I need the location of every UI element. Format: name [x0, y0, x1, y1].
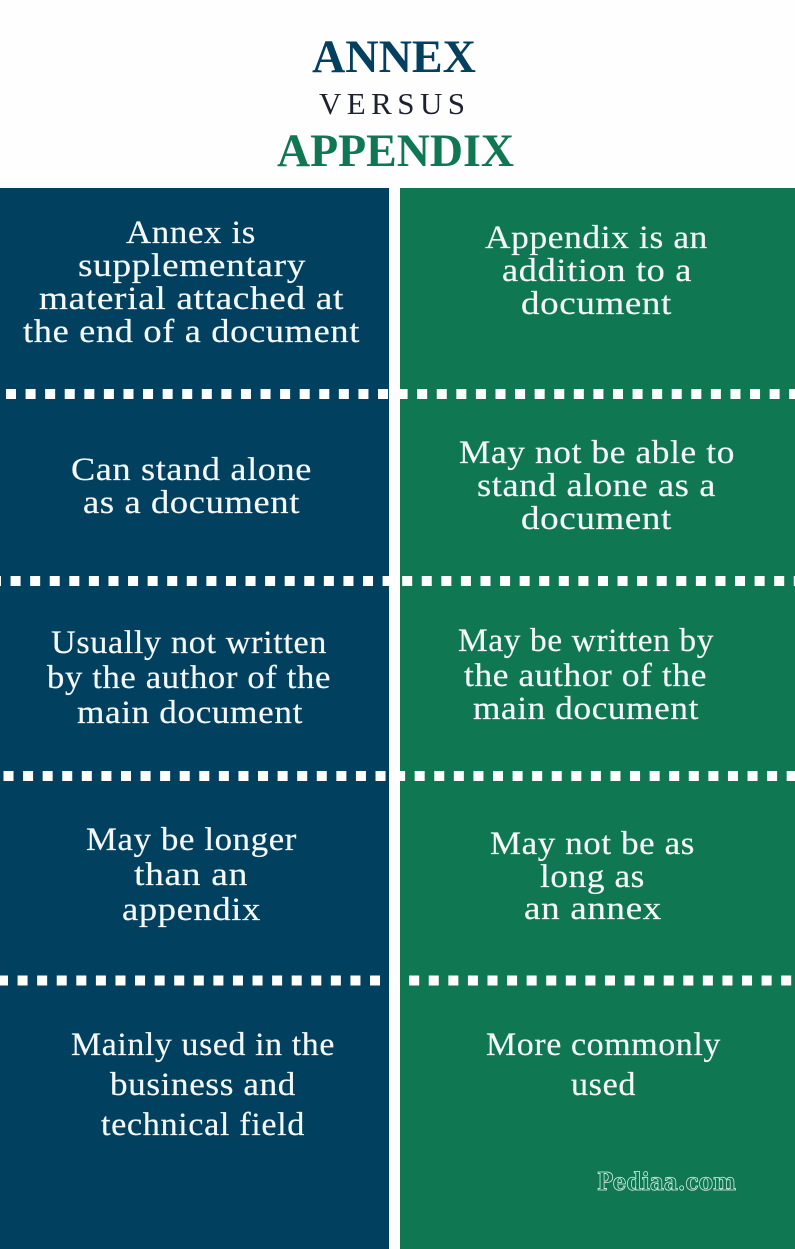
annex: length: May be longer [86, 822, 297, 858]
annex: usage: business and [110, 1067, 296, 1103]
appendix: authorship: the author of the [464, 658, 707, 694]
annex: definition [23, 215, 360, 350]
appendix: usage: More commonly [486, 1027, 721, 1063]
appendix: usage [486, 1027, 721, 1103]
appendix: length: May not be as [490, 826, 695, 862]
appendix: authorship: main document [473, 691, 699, 727]
annex: definition: the end of a document [23, 314, 360, 350]
appendix: independence: May not be able to [459, 435, 735, 471]
annex: authorship: by the author of the [47, 660, 331, 696]
appendix: definition [485, 220, 708, 322]
annex: usage [71, 1027, 335, 1143]
appendix: authorship [458, 623, 714, 727]
appendix: length: an annex [524, 891, 662, 927]
annex: usage: technical field [101, 1107, 305, 1143]
appendix: independence: document [521, 501, 672, 537]
annex: definition: material attached at [39, 281, 344, 317]
appendix: length: long as [540, 859, 645, 895]
annex: authorship: Usually not written [51, 625, 327, 661]
title: APPENDIX [277, 125, 514, 177]
appendix: definition: document [521, 286, 672, 322]
annex: definition: Annex is [126, 215, 256, 251]
annex: authorship: main document [77, 695, 303, 731]
annex: length: than an [134, 857, 248, 893]
annex: independence: Can stand alone [71, 452, 312, 488]
title [277, 31, 514, 177]
appendix: independence [459, 435, 735, 537]
title: ANNEX [312, 31, 476, 83]
appendix: definition: addition to a [502, 253, 692, 289]
title: VERSUS [319, 86, 465, 121]
annex: definition: supplementary [78, 248, 306, 284]
annex: usage: Mainly used in the [71, 1027, 335, 1063]
annex: independence: as a document [83, 485, 300, 521]
annex: length [86, 822, 297, 928]
panel: appendix column [400, 188, 795, 1249]
appendix: usage: used [571, 1067, 636, 1103]
appendix: authorship: May be written by [458, 623, 714, 659]
appendix: length [490, 826, 695, 927]
panel: annex column [0, 188, 389, 1249]
annex: independence [71, 452, 312, 521]
logo: Pediaa.com: Pediaa.com [597, 1167, 736, 1196]
appendix: independence: stand alone as a [477, 468, 716, 504]
annex: length: appendix [122, 892, 261, 928]
annex: authorship [47, 625, 331, 731]
appendix: definition: Appendix is an [485, 220, 708, 256]
